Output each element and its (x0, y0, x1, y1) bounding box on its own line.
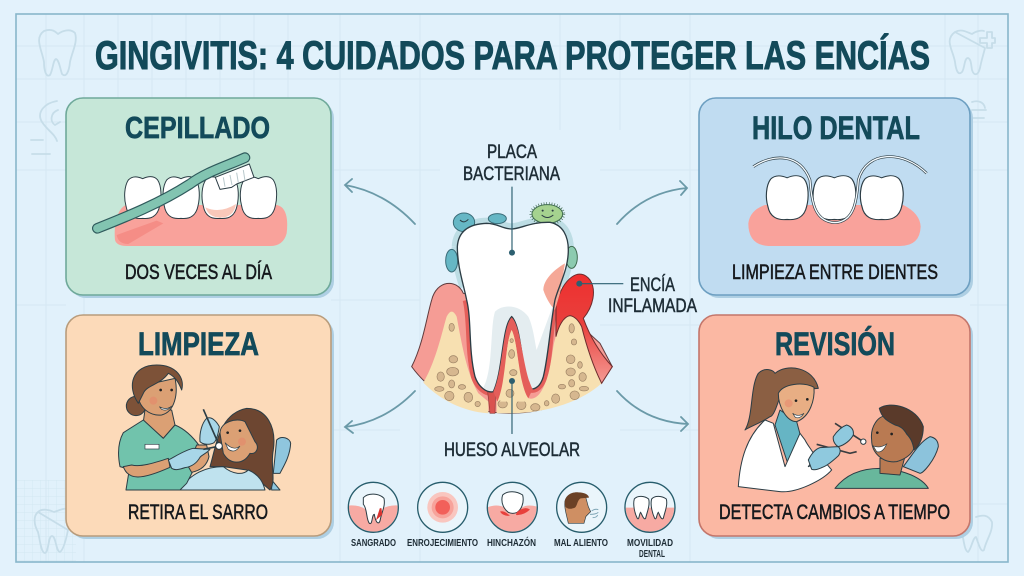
icon: movilidad dental (623, 482, 677, 535)
icon: mal aliento (557, 482, 607, 532)
arrow: to hilo dental (617, 181, 687, 224)
heading: revisión: REVISIÓN (775, 326, 895, 362)
label: encía inflamada (608, 275, 697, 317)
pointer dot: encía (576, 281, 582, 287)
arrow: to limpieza (345, 391, 415, 433)
label: movilidad dental: MOVILIDAD (627, 537, 673, 549)
plaque bacteria (446, 203, 577, 287)
heading: hilo dental: HILO DENTAL (752, 110, 920, 146)
heading: cepillado: CEPILLADO (125, 110, 270, 145)
label: mal aliento: MAL ALIENTO (554, 537, 608, 549)
pointer dot: placa (509, 250, 515, 256)
label: placa bacteriana: PLACA (487, 142, 537, 163)
icon: sangrado (347, 482, 400, 535)
label: movilidad dental (627, 537, 673, 560)
interradicular septum (493, 317, 533, 402)
label: hueso alveolar: HUESO ALVEOLAR (444, 440, 580, 461)
icon: watermark tooth bottom left (35, 509, 68, 553)
icon: watermark top right side (972, 101, 986, 118)
central tooth diagram (412, 187, 623, 434)
icon: enrojecimiento (418, 482, 468, 532)
arrow: to cepillado (345, 179, 415, 224)
panel: hilo dental (699, 98, 973, 298)
heading: limpieza: LIMPIEZA (138, 326, 259, 362)
label: encía inflamada: INFLAMADA (608, 296, 697, 317)
inflamed gum (556, 274, 612, 383)
icon: watermark tooth bottom right (961, 516, 992, 552)
pointer: encía (579, 282, 623, 285)
caption: limpieza entre dientes: LIMPIEZA ENTRE DIENTES (732, 261, 938, 284)
label: enrojecimiento: ENROJECIMIENTO (407, 537, 478, 549)
illustration: hygienist and patient (119, 365, 291, 490)
label: placa bacteriana (463, 142, 560, 185)
symptom icons row (347, 482, 677, 560)
icon: watermark tooth top left (39, 30, 76, 76)
label: placa bacteriana: BACTERIANA (463, 164, 560, 185)
arrow: to revisión (617, 391, 688, 431)
panel: limpieza (66, 315, 334, 539)
label: encía inflamada: ENCÍA (630, 275, 675, 296)
pointer dot: hueso (509, 378, 515, 384)
label: movilidad dental: DENTAL (639, 548, 665, 560)
caption: detecta cambios a tiempo: DETECTA CAMBIOS A TIEMPO (719, 501, 950, 524)
icon: watermark brushing left (31, 101, 60, 154)
panel: cepillado (66, 98, 334, 298)
pointer: hueso (510, 381, 514, 434)
caption: retira el sarro: RETIRA EL SARRO (128, 501, 268, 524)
gum and bone (412, 283, 612, 413)
illustration: toothbrush on teeth (97, 158, 287, 246)
pointer: placa (510, 187, 514, 253)
icon: hinchazón (487, 482, 540, 535)
illustration: floss between teeth (748, 157, 927, 246)
icon: watermark tooth top right (950, 30, 995, 74)
caption: dos veces al día: DOS VECES AL DÍA (125, 261, 272, 284)
tooth (457, 222, 568, 392)
illustration: dentist and patient (738, 368, 938, 492)
label: sangrado: SANGRADO (351, 537, 396, 549)
panel: revisión (699, 315, 973, 539)
label: hinchazón: HINCHAZÓN (487, 536, 536, 549)
